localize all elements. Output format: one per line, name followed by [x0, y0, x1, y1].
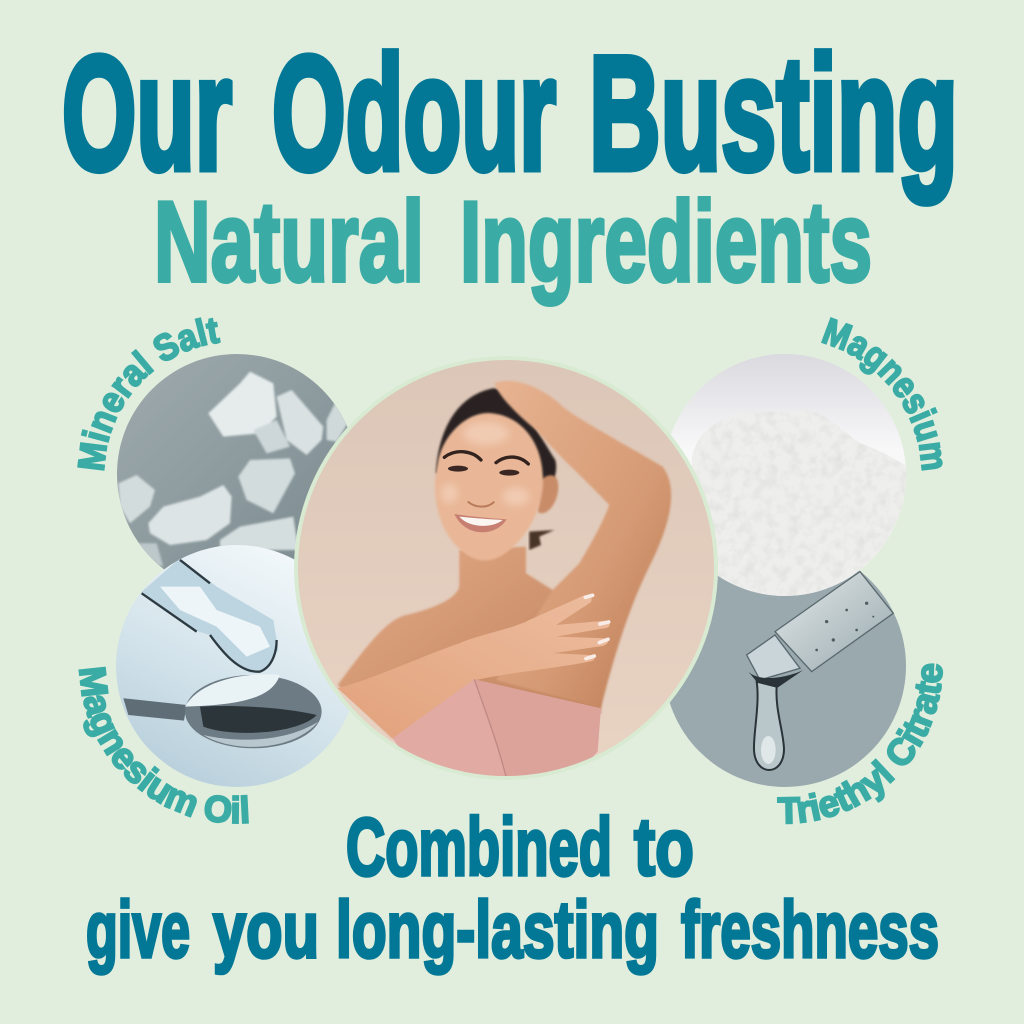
photo: mineral salt — [117, 354, 348, 570]
torso — [338, 547, 601, 738]
title: Odour — [272, 23, 556, 204]
nose — [468, 502, 494, 507]
tagline line two: give — [86, 885, 190, 974]
photo: magnesium powder — [671, 354, 906, 596]
tagline line two: long-lasting — [336, 885, 659, 974]
eyebrows and eyes — [444, 452, 528, 464]
tagline line one: to — [634, 802, 694, 893]
towel — [393, 680, 601, 776]
hair bun — [529, 530, 554, 550]
photo: woman with raised arm — [290, 355, 720, 790]
subtitle — [154, 179, 872, 306]
label: Mineral Salt: Mineral Salt — [77, 317, 221, 471]
face — [435, 413, 543, 560]
label: Magnesium: Magnesium — [821, 317, 943, 471]
tagline line two: you — [213, 885, 319, 974]
title: Our — [62, 23, 232, 204]
hair — [434, 386, 558, 480]
photo: magnesium oil — [110, 540, 360, 790]
subtitle: Natural — [154, 179, 424, 306]
photo: glass dropper with drip — [747, 572, 893, 770]
label: Triethyl Citrate: Triethyl Citrate — [776, 663, 944, 824]
face highlights — [441, 422, 529, 506]
label: Magnesium Oil: Magnesium Oil — [78, 666, 249, 824]
tagline line two — [86, 885, 939, 974]
photo: triethyl citrate background — [670, 570, 906, 787]
smile — [454, 514, 507, 532]
raised arm — [494, 381, 671, 708]
fingernails — [585, 595, 609, 659]
title — [62, 23, 958, 204]
forearm and hand — [338, 595, 610, 738]
ear — [538, 475, 558, 513]
tagline line one: Combined — [346, 802, 612, 893]
